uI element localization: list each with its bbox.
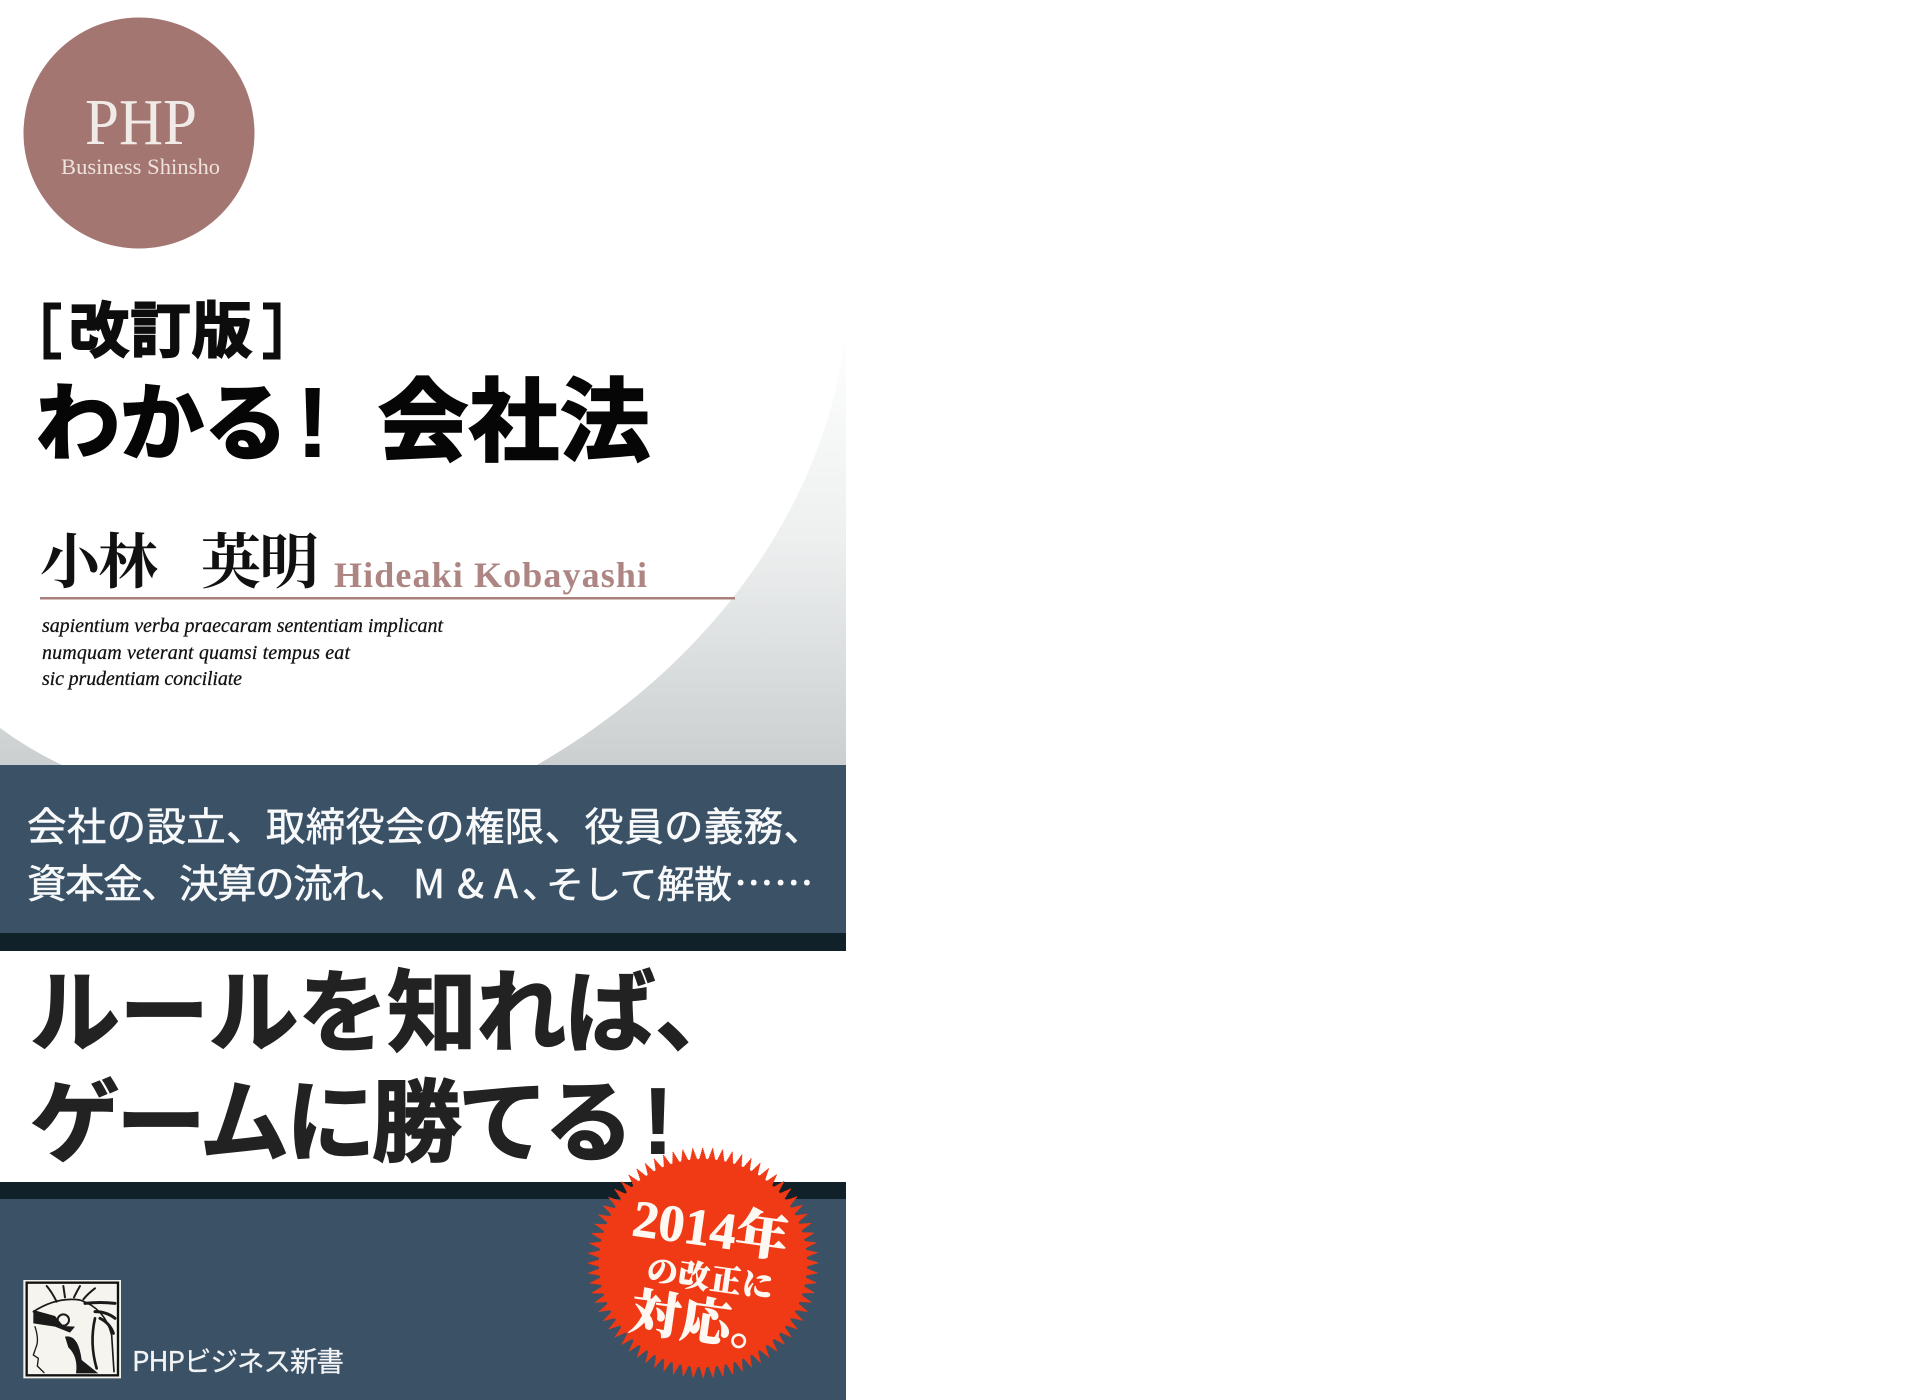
- latin motto: [42, 615, 443, 690]
- headline: ルールを知れば、: [30, 940, 745, 1070]
- author name: Hideaki Kobayashi: [334, 555, 647, 595]
- author name: 英明: [201, 530, 319, 596]
- band: topics: 資本金、決算の流れ、: [27, 853, 409, 910]
- starburst text: 2014年: [629, 1190, 792, 1269]
- rule: [40, 597, 735, 600]
- publisher badge: PHP: [85, 86, 197, 159]
- band: topics: A: [494, 853, 518, 910]
- band: topics: [0, 765, 846, 951]
- band: topics: そして解散: [546, 854, 732, 909]
- author name: 小林: [40, 530, 158, 596]
- publisher badge: Business Shinsho: [61, 154, 220, 179]
- main title: [36, 349, 650, 479]
- headline: [30, 940, 745, 1180]
- lower band: [0, 1182, 846, 1400]
- starburst text: [627, 1190, 792, 1361]
- headline: ゲームに勝てる: [30, 1050, 634, 1180]
- starburst text: の改正に: [645, 1252, 776, 1305]
- icon: publisher logo: [23, 1280, 121, 1378]
- band: topics: &: [457, 853, 484, 910]
- band: topics: …: [774, 853, 814, 910]
- edition label: 改訂版: [69, 283, 252, 370]
- latin motto: sic prudentiam conciliate: [42, 668, 242, 690]
- headline: !: [642, 1068, 674, 1175]
- latin motto: numquam veterant quamsi tempus eat: [42, 642, 350, 664]
- main title: わかる: [36, 357, 288, 478]
- band: topics: 会社の設立、取締役会の権限、役員の義務、: [27, 796, 823, 853]
- upper cover background: [0, 0, 846, 765]
- main title: !: [296, 367, 329, 479]
- latin motto: sapientium verba praecaram sententiam implicant: [42, 615, 443, 637]
- logo wordmark: PHPビジネス新書: [132, 1339, 344, 1379]
- band: topics: M: [413, 853, 445, 910]
- band: topics: 、: [522, 853, 562, 910]
- main title: 会社法: [378, 349, 650, 479]
- band: topics: …: [734, 853, 774, 910]
- starburst text: 対応。: [627, 1284, 786, 1361]
- author name: [40, 530, 647, 596]
- starburst badge: [589, 1149, 817, 1377]
- publisher badge: [24, 18, 254, 248]
